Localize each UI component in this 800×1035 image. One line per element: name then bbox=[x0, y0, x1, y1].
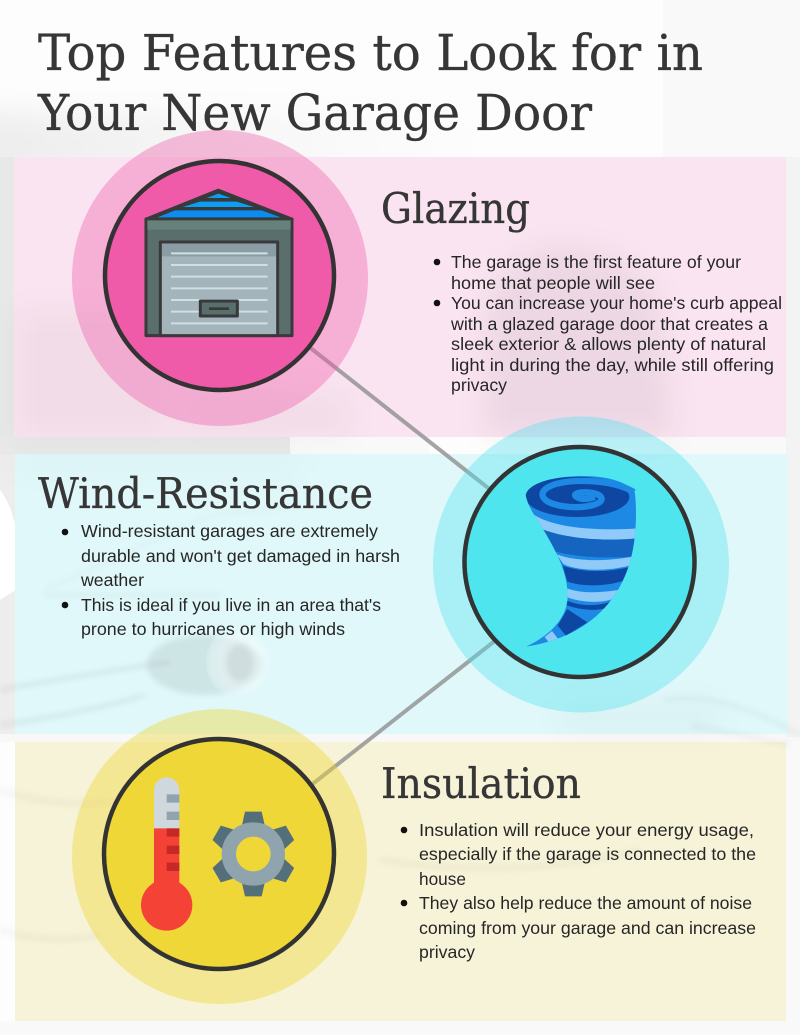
panel: wind-resistance background bbox=[15, 454, 788, 734]
heading: insulation: Insulation bbox=[381, 759, 581, 808]
heading: wind-resistance: Wind-Resistance bbox=[38, 469, 373, 518]
text block: wind-resistance: weather bbox=[80, 570, 144, 590]
text block: wind-resistance bbox=[62, 521, 400, 639]
thermometer bbox=[141, 777, 192, 931]
text block: insulation: house bbox=[419, 869, 466, 889]
connector: wind-resistance to insulation bbox=[310, 640, 496, 786]
text block: insulation: coming from your garage and can increase bbox=[419, 918, 756, 938]
connector: glazing to wind-resistance bbox=[308, 346, 492, 491]
text block: glazing: with a glazed garage door that creates a bbox=[450, 314, 768, 334]
heading: glazing: Glazing bbox=[381, 184, 530, 233]
text block: glazing: privacy bbox=[451, 375, 507, 395]
text block: wind-resistance: Wind-resistant garages are extremely bbox=[81, 521, 378, 541]
text block: glazing: light in during the day, while still offering bbox=[451, 355, 774, 375]
icon: tornado in cyan circle bbox=[433, 416, 729, 712]
title: Your New Garage Door bbox=[37, 84, 592, 142]
icon: garage in pink circle bbox=[72, 130, 368, 426]
text block: glazing: home that people will see bbox=[451, 273, 655, 293]
panel: insulation background bbox=[15, 742, 786, 1021]
title: Top Features to Look for in bbox=[38, 24, 703, 82]
text block: insulation: Insulation will reduce your energy usage, bbox=[419, 820, 754, 840]
text block: insulation bbox=[401, 820, 756, 962]
text block: wind-resistance: This is ideal if you live in an area that's bbox=[81, 595, 381, 615]
text block: glazing bbox=[434, 252, 782, 395]
faded photo details over panels bbox=[0, 245, 800, 939]
text block: glazing: You can increase your home's curb appeal bbox=[451, 293, 782, 313]
title bbox=[37, 24, 703, 142]
text block: wind-resistance: durable and won't get damaged in harsh bbox=[81, 546, 400, 566]
panel: glazing background bbox=[14, 157, 786, 437]
text block: glazing: The garage is the first feature of your bbox=[451, 252, 741, 272]
text block: insulation: privacy bbox=[419, 942, 475, 962]
text block: insulation: especially if the garage is connected to the bbox=[419, 844, 756, 864]
gear bbox=[211, 812, 296, 896]
text block: glazing: sleek exterior & allows plenty of natural bbox=[451, 334, 766, 354]
text block: insulation: They also help reduce the amount of noise bbox=[419, 893, 752, 913]
icon: thermometer and gear in yellow circle bbox=[72, 709, 367, 1004]
text block: wind-resistance: prone to hurricanes or high winds bbox=[81, 619, 345, 639]
